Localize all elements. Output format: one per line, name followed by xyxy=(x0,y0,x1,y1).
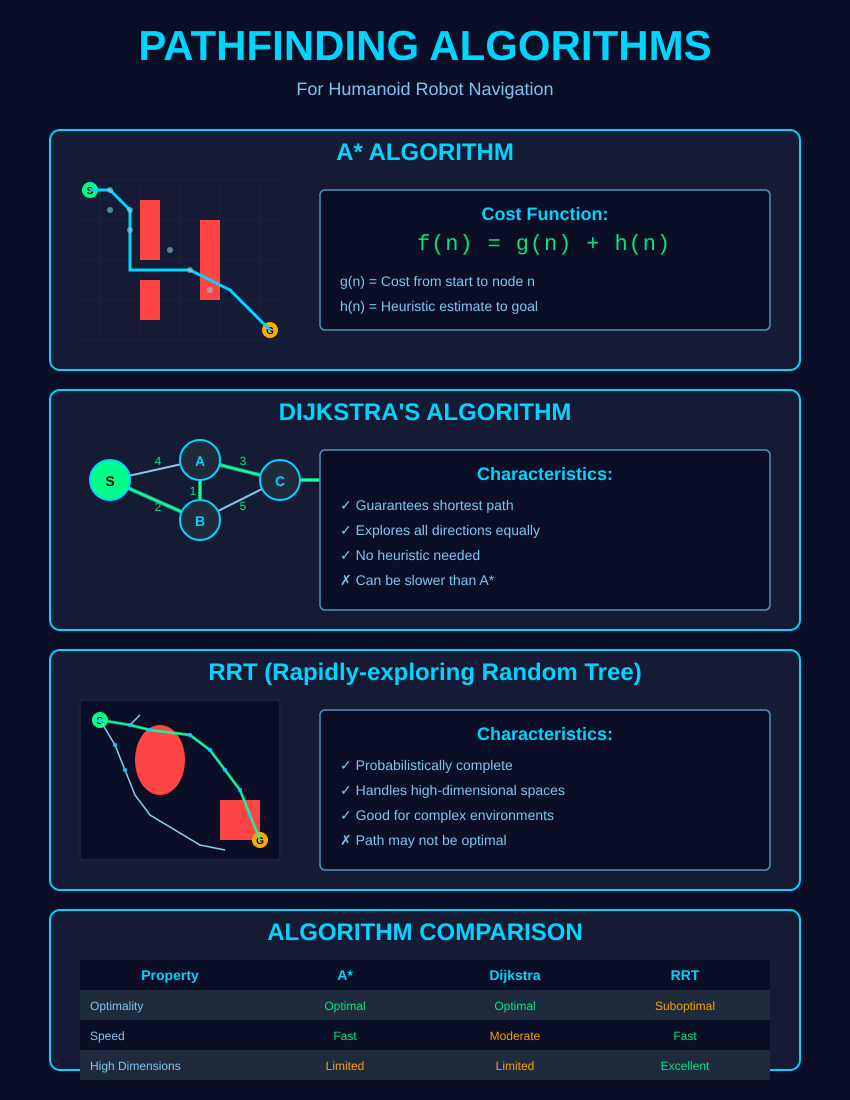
chart: A* grid search: G xyxy=(266,326,274,337)
heading: algorithm comparison: ALGORITHM COMPARISON xyxy=(267,919,583,946)
info box: RRT characteristics: ✓ Good for complex environments xyxy=(340,807,554,823)
comparison table: Optimality xyxy=(90,999,143,1013)
chart: RRT tree: G xyxy=(256,836,264,847)
chart: Dijkstra graph: 1 xyxy=(190,484,197,498)
comparison table: Optimal xyxy=(494,999,536,1013)
info box: cost function: f(n) = g(n) + h(n) xyxy=(417,232,671,257)
comparison table xyxy=(80,960,770,1080)
chart: RRT tree: S xyxy=(97,716,104,727)
chart: RRT tree xyxy=(80,700,280,860)
comparison table: Moderate xyxy=(490,1029,541,1043)
info box: RRT characteristics: ✓ Handles high-dimensional spaces xyxy=(340,782,565,798)
panel: A* algorithm xyxy=(50,130,800,370)
chart: Dijkstra graph: C xyxy=(275,473,285,489)
comparison table: Limited xyxy=(326,1059,364,1073)
chart: Dijkstra graph: 2 xyxy=(155,500,162,514)
info box: cost function xyxy=(320,190,770,330)
comparison table: Excellent xyxy=(661,1059,710,1073)
comparison table: Property xyxy=(141,967,199,983)
info box: Dijkstra characteristics: ✓ Guarantees shortest path xyxy=(340,497,514,513)
info box: Dijkstra characteristics xyxy=(320,450,770,610)
info box: Dijkstra characteristics: ✗ Can be slower than A* xyxy=(340,572,495,588)
info box: RRT characteristics: ✗ Path may not be optimal xyxy=(340,832,507,848)
panel: algorithm comparison xyxy=(50,910,800,1080)
comparison table: Dijkstra xyxy=(489,967,541,983)
comparison table: RRT xyxy=(671,967,700,983)
info box: cost function: g(n) = Cost from start to node n xyxy=(340,273,535,289)
chart: Dijkstra graph: A xyxy=(195,453,205,469)
chart: Dijkstra graph: B xyxy=(195,513,205,529)
subtitle: For Humanoid Robot Navigation xyxy=(296,79,554,99)
chart: Dijkstra graph: 3 xyxy=(240,454,247,468)
heading: A* algorithm: A* ALGORITHM xyxy=(336,139,514,166)
info box: cost function: h(n) = Heuristic estimate to goal xyxy=(340,298,538,314)
comparison table: Optimal xyxy=(324,999,366,1013)
comparison table: Suboptimal xyxy=(655,999,715,1013)
heading: Dijkstra's algorithm: DIJKSTRA'S ALGORITHM xyxy=(279,399,571,426)
chart: Dijkstra graph: 4 xyxy=(155,454,162,468)
comparison table: High Dimensions xyxy=(90,1059,181,1073)
info box: Dijkstra characteristics: Characteristics: xyxy=(477,464,613,484)
panel: Dijkstra's algorithm xyxy=(50,390,800,630)
info box: Dijkstra characteristics: ✓ Explores all directions equally xyxy=(340,522,540,538)
comparison table: Fast xyxy=(673,1029,697,1043)
info box: RRT characteristics xyxy=(320,710,770,870)
comparison table: A* xyxy=(337,967,353,983)
comparison table: Limited xyxy=(496,1059,534,1073)
title: PATHFINDING ALGORITHMS xyxy=(138,22,712,69)
info box: cost function: Cost Function: xyxy=(482,204,608,224)
panel: RRT xyxy=(50,650,800,890)
comparison table: Speed xyxy=(90,1029,125,1043)
info box: Dijkstra characteristics: ✓ No heuristic needed xyxy=(340,547,480,563)
heading: RRT: RRT (Rapidly-exploring Random Tree) xyxy=(208,659,642,686)
chart: A* grid search: S xyxy=(87,186,94,197)
info box: RRT characteristics: ✓ Probabilistically complete xyxy=(340,757,513,773)
comparison table: Fast xyxy=(333,1029,357,1043)
chart: Dijkstra graph xyxy=(90,440,320,540)
chart: Dijkstra graph: S xyxy=(105,473,115,489)
info box: RRT characteristics: Characteristics: xyxy=(477,724,613,744)
chart: A* grid search xyxy=(80,180,280,340)
chart: Dijkstra graph: 5 xyxy=(240,499,247,513)
